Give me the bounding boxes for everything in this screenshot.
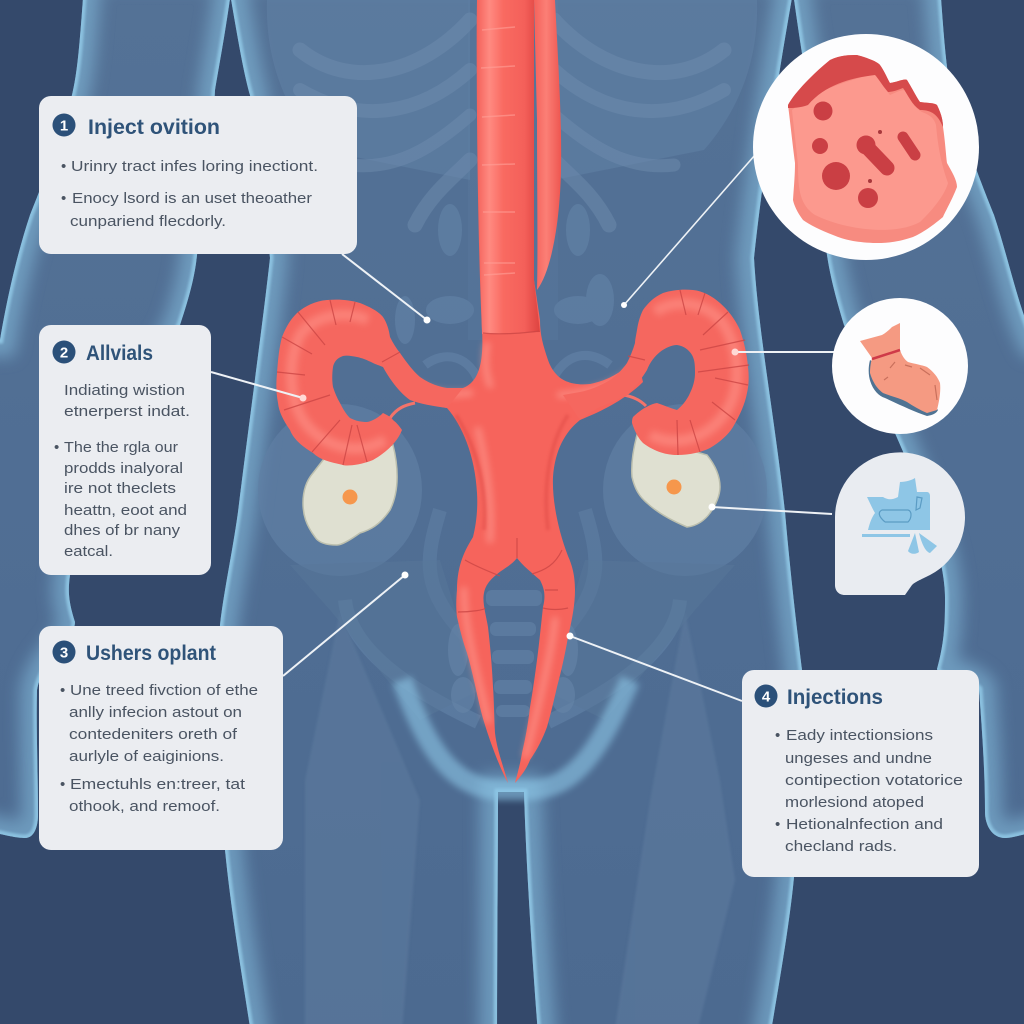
text block 3: •: [60, 682, 65, 699]
left ovary: [303, 445, 397, 545]
main trunk and branches: [388, 0, 643, 783]
spine and vertebrae: [395, 0, 614, 717]
red reproductive tract: [276, 0, 749, 783]
leader to lesion circle: [621, 155, 755, 308]
text block 3: •: [60, 776, 65, 793]
text block 4: checland rads.: [785, 838, 897, 855]
number badge 3: 3: [60, 644, 68, 662]
ovarian ligaments: [390, 395, 646, 418]
number badge 3: [52, 640, 76, 664]
number badge 1: 1: [60, 118, 68, 134]
text block 3: Une treed fivction of ethe: [70, 682, 258, 699]
text block 4: Eady intectionsions: [786, 727, 933, 744]
text block 2: •: [54, 439, 59, 456]
pelvic basin outline: [402, 680, 630, 790]
text block 4: ungeses and undne: [785, 750, 932, 767]
text block 1: Urinry tract infes loring inectiont.: [71, 158, 318, 175]
leader to sock circle: [732, 348, 835, 356]
leader 2: [211, 372, 306, 402]
text block 2: [54, 382, 190, 560]
text block 2: prodds inalyoral: [64, 460, 183, 477]
text block 2: The the rgla our: [64, 439, 178, 456]
right ovary: [632, 435, 720, 527]
text block 4: [775, 727, 963, 855]
text block 3: anlly infecion astout on: [69, 704, 242, 721]
text block 4: Hetionalnfection and: [786, 816, 943, 833]
icon: blue device badge: [835, 452, 965, 595]
number badge 2: [52, 340, 76, 364]
heading 1: Inject ovition: [88, 116, 220, 139]
side tube: [534, 0, 561, 290]
text block 2: ire not theclets: [64, 480, 176, 497]
number badge 2: 2: [60, 344, 68, 362]
text block 3: [60, 682, 258, 815]
highlights: [405, 345, 632, 755]
rib cage: [267, 0, 757, 225]
text block 2: dhes of br nany: [64, 522, 181, 539]
leader 3: [283, 572, 408, 676]
number badge 1: [52, 114, 76, 136]
text block 2: Indiating wistion: [64, 382, 185, 399]
fold lines at legs of tract: [458, 538, 568, 612]
text block 3: Emectuhls en:treer, tat: [70, 776, 246, 793]
text block 4: contipection votatorice: [785, 772, 963, 789]
text block 2: eatcal.: [64, 543, 113, 560]
right coiled tube: [563, 290, 749, 455]
number badge 4: [754, 684, 778, 708]
trunk shading: [477, 0, 540, 334]
shaded center edge: [456, 415, 568, 530]
text block 3: aurlyle of eaiginions.: [69, 748, 224, 765]
leader 4: [566, 632, 742, 701]
text block 4: •: [775, 727, 780, 744]
left coiled tube: [276, 300, 463, 465]
text block 1: •: [61, 158, 66, 175]
icon: sock-shaped organ circle: [832, 298, 968, 434]
text block 1: cunpariend flecdorly.: [70, 213, 226, 230]
panel: card 4: [742, 670, 979, 877]
text block 2: heattn, eoot and: [64, 502, 187, 519]
heading 2: Allvials: [86, 342, 153, 365]
panel: card 1: [39, 96, 357, 254]
text block 1: •: [61, 190, 66, 207]
panel: card 3: [39, 626, 283, 850]
heading 3: Ushers oplant: [86, 642, 216, 665]
leader lines: [211, 155, 835, 701]
heading 4: Injections: [787, 686, 883, 709]
trunk rings: [481, 27, 515, 275]
leader 1: [342, 254, 430, 324]
skeleton: ribs, spine and pelvis: [258, 0, 767, 790]
panel: card 2: [39, 325, 211, 575]
torso and legs: [220, 0, 802, 1024]
number badge 4: 4: [762, 688, 771, 706]
icon: lesioned tissue circle: [753, 34, 979, 260]
text block 1: [61, 158, 318, 230]
text block 4: morlesiond atoped: [785, 794, 924, 811]
text block 1: Enocy lsord is an uset theoather: [72, 190, 312, 207]
leader to blue icon: [708, 504, 832, 514]
hip bones: [258, 404, 767, 722]
text block 4: •: [775, 816, 780, 833]
text block 3: contedeniters oreth of: [69, 726, 238, 743]
cream ovaries: [303, 435, 720, 545]
text block 3: othook, and remoof.: [69, 798, 220, 815]
text block 2: etnerperst indat.: [64, 403, 190, 420]
